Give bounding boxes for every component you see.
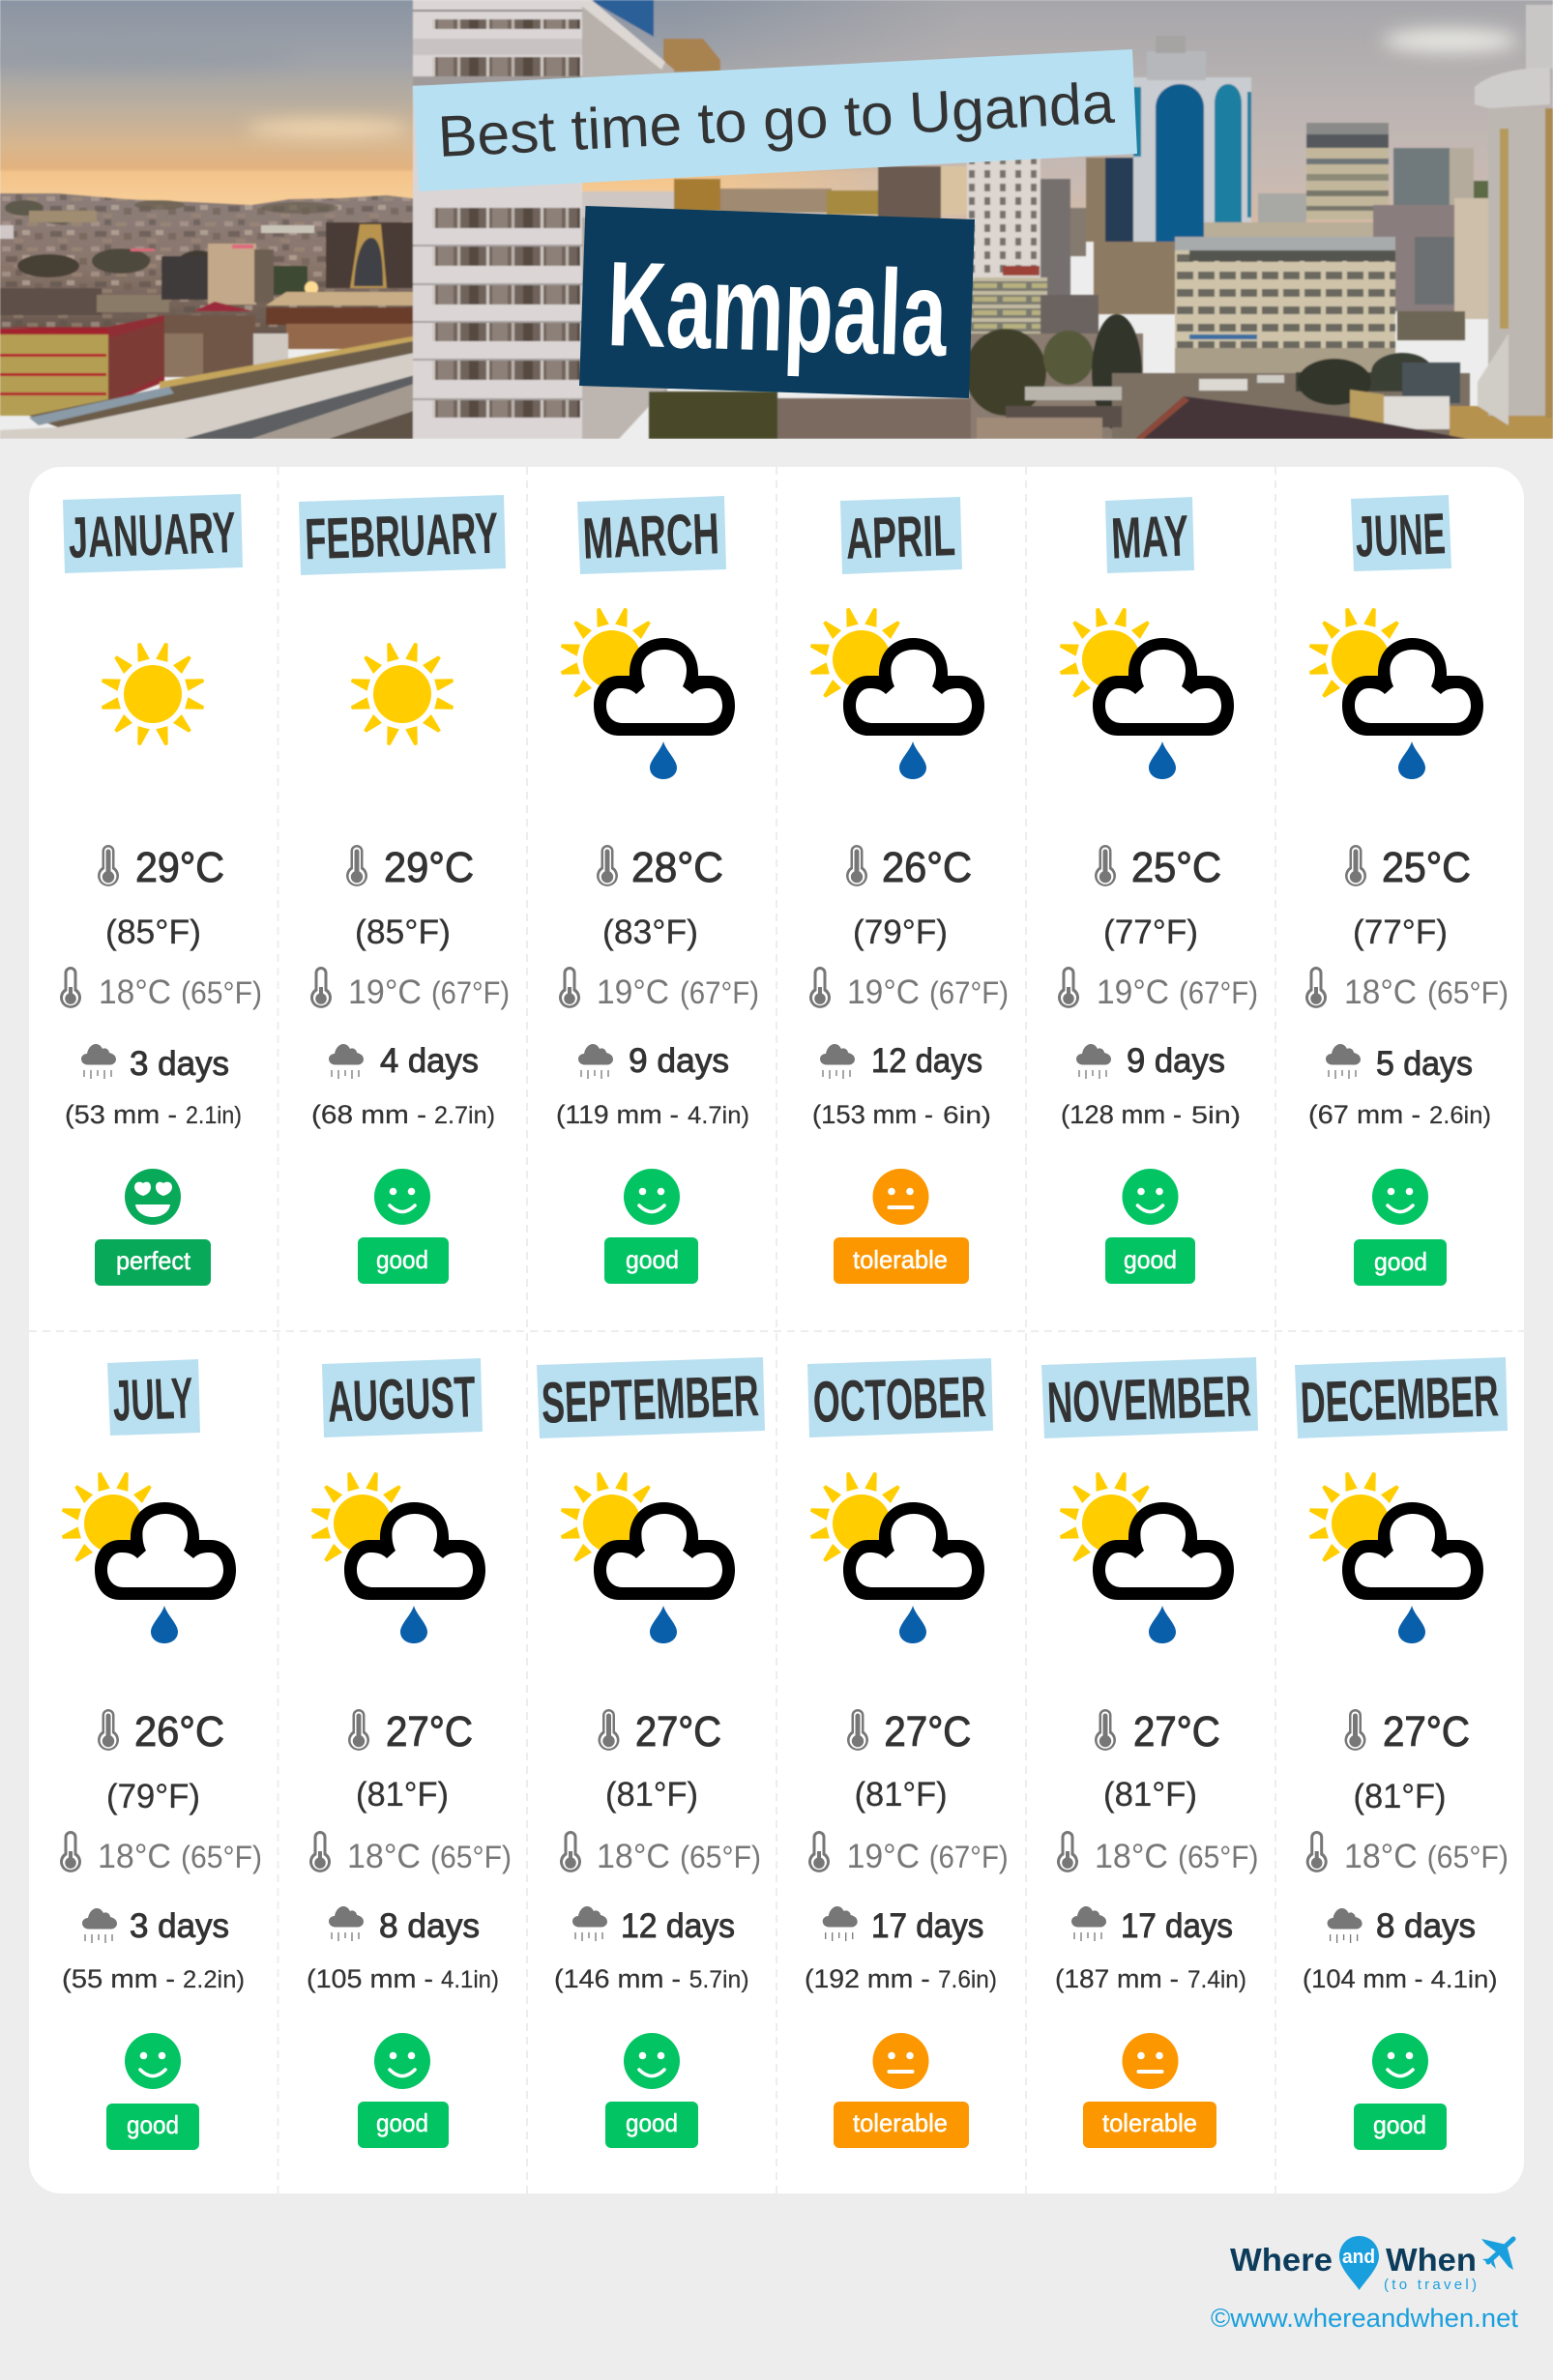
icon: sun, cloud and rain	[1308, 607, 1483, 779]
logo: Where and When (to travel): Where	[1230, 2242, 1333, 2278]
rainfall: (192 mm -	[805, 1964, 930, 1993]
rainy days	[329, 1042, 479, 1080]
icon: smiley	[1372, 2033, 1428, 2089]
high temperature: 29°C	[384, 844, 474, 891]
high temperature: 29°C	[135, 844, 224, 891]
icon: sun, cloud and rain	[310, 1471, 485, 1643]
low temperature	[1057, 1831, 1259, 1875]
rainy days	[572, 1906, 735, 1945]
high temperature	[846, 844, 972, 891]
rainy days	[329, 1906, 480, 1945]
panel: June	[1305, 495, 1509, 1286]
heading: June	[1351, 495, 1451, 571]
low temperature: 19°C	[348, 973, 422, 1011]
high temperature fahrenheit: (79°F)	[853, 914, 948, 951]
rainfall: 4.7in)	[688, 1102, 749, 1129]
heading: May: MAY	[1110, 503, 1189, 571]
icon: smiley	[374, 1169, 430, 1225]
low temperature	[60, 1831, 262, 1875]
heading: April	[840, 497, 962, 574]
high temperature	[98, 844, 224, 891]
rainy days	[1071, 1906, 1233, 1945]
icon: smiley	[624, 1169, 680, 1225]
rainfall	[1303, 1964, 1498, 1993]
rating: perfect: perfect	[116, 1246, 191, 1275]
logo: Where and When (to travel): (to travel)	[1384, 2277, 1477, 2293]
icon: map pin with and: and	[1342, 2247, 1375, 2268]
icon: airplane	[1481, 2239, 1513, 2270]
rainy days: 3 days	[130, 1045, 229, 1083]
low temperature: 18°C	[1344, 1838, 1418, 1875]
panel: July	[60, 1359, 262, 2150]
rainfall: 2.6in)	[1429, 1102, 1491, 1129]
low temperature: (67°F)	[431, 975, 510, 1010]
high temperature	[847, 1708, 971, 1756]
low temperature: (65°F)	[430, 1840, 512, 1874]
panel: January	[60, 494, 262, 1286]
high temperature	[598, 1708, 721, 1756]
rainfall	[1055, 1964, 1246, 1993]
high temperature fahrenheit: (81°F)	[356, 1776, 449, 1814]
rainy days	[820, 1042, 982, 1080]
high temperature	[1345, 844, 1471, 891]
rainy days	[1328, 1907, 1476, 1945]
icon: smiley	[624, 2033, 680, 2089]
heading: July: JULY	[111, 1365, 194, 1434]
icon: sun, cloud and rain	[1059, 607, 1234, 779]
logo: Where and When (to travel)	[1230, 2236, 1513, 2293]
high temperature fahrenheit: (81°F)	[1103, 1776, 1197, 1814]
low temperature	[1305, 967, 1509, 1011]
website credit: ©www.whereandwhen.net	[1211, 2304, 1518, 2333]
rainfall	[311, 1100, 495, 1129]
rainfall: (146 mm -	[554, 1964, 681, 1993]
low temperature: (65°F)	[1427, 975, 1509, 1010]
low temperature: 19°C	[847, 973, 920, 1011]
high temperature fahrenheit: (85°F)	[105, 914, 201, 951]
heading: November	[1041, 1357, 1258, 1438]
heading: November: NOVEMBER	[1046, 1363, 1252, 1436]
rainfall: 2.1in)	[186, 1102, 242, 1129]
rainy days: 8 days	[379, 1907, 480, 1945]
low temperature	[60, 967, 262, 1011]
high temperature fahrenheit: (79°F)	[106, 1778, 200, 1815]
rainfall: (128 mm -	[1061, 1100, 1182, 1129]
low temperature: 18°C	[1095, 1838, 1168, 1875]
rainfall	[62, 1964, 245, 1993]
low temperature	[808, 1831, 1009, 1875]
rating: good	[106, 2104, 199, 2150]
rainy days: 8 days	[1376, 1907, 1476, 1945]
low temperature: 18°C	[597, 1838, 670, 1875]
rainfall	[65, 1100, 242, 1129]
rating: good	[1354, 2104, 1447, 2150]
rainfall: 2.7in)	[434, 1102, 495, 1129]
rainfall: (53 mm -	[65, 1100, 177, 1129]
high temperature: 27°C	[635, 1708, 721, 1756]
rainfall: 4.1in)	[441, 1966, 499, 1993]
rainfall	[1308, 1100, 1491, 1129]
high temperature fahrenheit: (81°F)	[855, 1776, 948, 1814]
high temperature: 25°C	[1382, 844, 1471, 891]
rainy days: 17 days	[1121, 1907, 1233, 1945]
rating: good: good	[1124, 1245, 1177, 1274]
rainy days: 5 days	[1376, 1045, 1473, 1083]
low temperature	[309, 1831, 512, 1875]
high temperature: 27°C	[386, 1708, 473, 1756]
heading: February: FEBRUARY	[304, 501, 499, 571]
low temperature: (65°F)	[1178, 1840, 1259, 1874]
low temperature: (65°F)	[680, 1840, 761, 1874]
low temperature: 18°C	[347, 1838, 421, 1875]
rainfall: (55 mm -	[62, 1964, 175, 1993]
rainfall: 7.4in)	[1187, 1966, 1246, 1993]
low temperature	[1306, 1831, 1509, 1875]
rating: good: good	[127, 2110, 179, 2139]
panel: October	[805, 1358, 1009, 2148]
logo: Where and When (to travel): When	[1386, 2242, 1477, 2278]
panel: May	[1058, 497, 1258, 1284]
rainfall: (153 mm -	[812, 1100, 933, 1129]
low temperature: (65°F)	[181, 975, 262, 1010]
city banner: Kampala: Kampala	[605, 237, 950, 382]
high temperature fahrenheit: (85°F)	[355, 914, 451, 951]
icon: sun, cloud and rain	[809, 607, 984, 779]
icon: smiley	[125, 2033, 181, 2089]
rating: good	[1354, 1239, 1447, 1286]
low temperature	[310, 967, 510, 1011]
icon: sun	[101, 642, 205, 746]
rainfall: 7.6in)	[938, 1966, 997, 1993]
heading: August: AUGUST	[327, 1364, 477, 1435]
low temperature: 18°C	[99, 973, 171, 1011]
high temperature fahrenheit: (77°F)	[1103, 914, 1198, 951]
rainy days: 9 days	[1127, 1042, 1225, 1080]
heading: July	[107, 1359, 200, 1436]
rainy days	[82, 1907, 229, 1945]
low temperature: (67°F)	[929, 1840, 1009, 1874]
rainy days: 4 days	[380, 1042, 479, 1080]
rating: tolerable: tolerable	[853, 2108, 948, 2137]
icon: smiley	[1372, 1169, 1428, 1225]
panel: August	[307, 1358, 512, 2148]
high temperature: 27°C	[1383, 1708, 1470, 1756]
rainfall	[812, 1100, 991, 1129]
heading: October	[807, 1358, 993, 1437]
low temperature	[1058, 967, 1258, 1011]
city banner: Kampala	[579, 206, 975, 398]
rainy days	[81, 1044, 229, 1083]
high temperature: 25°C	[1131, 844, 1221, 891]
low temperature	[809, 967, 1009, 1011]
rainfall: (119 mm -	[556, 1100, 679, 1129]
high temperature	[98, 1708, 224, 1756]
panel: February	[299, 495, 510, 1284]
rainfall	[556, 1100, 749, 1129]
icon: smiley	[1122, 1169, 1178, 1225]
rainfall: 5.7in)	[689, 1966, 749, 1993]
rating: tolerable	[834, 1237, 969, 1284]
icon: smiley	[374, 2033, 430, 2089]
rainfall: 5in)	[1191, 1102, 1241, 1129]
heading: June: JUNE	[1354, 501, 1447, 569]
low temperature: (65°F)	[1427, 1840, 1509, 1874]
rainfall: 6in)	[943, 1102, 991, 1129]
icon: sun	[350, 642, 454, 746]
heading: May	[1105, 497, 1194, 573]
panel: white months card	[29, 467, 1524, 2193]
high temperature: 27°C	[884, 1708, 971, 1756]
icon: sun, cloud and rain	[61, 1471, 236, 1643]
rating: good: good	[376, 2108, 428, 2137]
icon: sun, cloud and rain	[1059, 1471, 1234, 1643]
rainy days: 12 days	[871, 1042, 982, 1080]
heading: March: MARCH	[581, 501, 720, 571]
rainy days: 3 days	[130, 1907, 229, 1945]
rainy days	[1326, 1044, 1473, 1083]
icon: neutral face	[872, 2033, 928, 2089]
high temperature: 27°C	[1133, 1708, 1220, 1756]
panel: March	[556, 496, 759, 1284]
rainfall: (187 mm -	[1055, 1964, 1179, 1993]
low temperature: (67°F)	[680, 975, 759, 1010]
low temperature: 18°C	[1344, 973, 1417, 1011]
rainy days	[1076, 1042, 1225, 1080]
rating: good	[1105, 1237, 1195, 1284]
icon: neutral face	[872, 1169, 928, 1225]
low temperature: 19°C	[1097, 973, 1169, 1011]
low temperature	[560, 1831, 761, 1875]
rating: good	[358, 2102, 449, 2148]
high temperature fahrenheit: (83°F)	[602, 914, 698, 951]
high temperature fahrenheit: (81°F)	[1354, 1778, 1447, 1815]
high temperature: 26°C	[134, 1708, 224, 1756]
icon: map pin with and	[1339, 2236, 1379, 2290]
rainy days	[823, 1906, 983, 1945]
title banner: Best time to go to Uganda	[413, 49, 1137, 191]
title banner: Best time to go to Uganda: Best time to go to Uganda	[436, 71, 1116, 169]
rating: tolerable	[1083, 2102, 1216, 2148]
heading: August	[322, 1358, 483, 1437]
rainfall: (104 mm -	[1303, 1964, 1423, 1993]
rainy days: 9 days	[629, 1042, 729, 1080]
heading: September	[537, 1357, 765, 1438]
low temperature: 19°C	[597, 973, 669, 1011]
heading: February	[299, 495, 506, 575]
icon: sun, cloud and rain	[560, 1471, 735, 1643]
rating: tolerable	[834, 2102, 969, 2148]
rating: good	[604, 1237, 698, 1284]
rating: tolerable: tolerable	[853, 1245, 948, 1274]
rainfall	[805, 1964, 997, 1993]
heading: September: SEPTEMBER	[541, 1363, 760, 1436]
panel: April	[809, 497, 1009, 1284]
header photo: Kampala skyline	[0, 0, 1553, 439]
high temperature	[1344, 1708, 1470, 1756]
panel: December	[1295, 1357, 1509, 2150]
rating: good: good	[626, 1245, 679, 1274]
rating: good: good	[376, 1245, 428, 1274]
rating: good: good	[1373, 2110, 1426, 2139]
rating: perfect	[95, 1239, 211, 1286]
rating: good: good	[1374, 1247, 1427, 1276]
low temperature: (67°F)	[929, 975, 1009, 1010]
heading: March	[577, 496, 726, 574]
low temperature	[559, 967, 759, 1011]
high temperature: 26°C	[882, 844, 972, 891]
high temperature	[1095, 844, 1221, 891]
icon: love-eyes smiley	[125, 1169, 181, 1225]
panel: November	[1041, 1357, 1259, 2148]
rainy days: 12 days	[621, 1907, 735, 1945]
heading: January	[63, 494, 243, 573]
heading: January: JANUARY	[68, 500, 237, 570]
rainy days	[578, 1042, 729, 1080]
high temperature	[1095, 1708, 1220, 1756]
high temperature	[346, 844, 474, 891]
rainfall: 2.2in)	[183, 1966, 245, 1993]
high temperature fahrenheit: (77°F)	[1353, 914, 1448, 951]
icon: sun, cloud and rain	[809, 1471, 984, 1643]
high temperature fahrenheit: (81°F)	[605, 1776, 698, 1814]
rainfall	[1061, 1100, 1241, 1129]
panel: September	[537, 1357, 765, 2148]
low temperature: 19°C	[847, 1838, 920, 1875]
rainfall: (67 mm -	[1308, 1100, 1421, 1129]
rainfall: (105 mm -	[307, 1964, 433, 1993]
low temperature: (65°F)	[181, 1840, 262, 1874]
rating: good	[358, 1237, 449, 1284]
icon: neutral face	[1122, 2033, 1178, 2089]
low temperature: (67°F)	[1179, 975, 1258, 1010]
rating: tolerable: tolerable	[1102, 2108, 1197, 2137]
high temperature	[348, 1708, 473, 1756]
low temperature: 18°C	[98, 1838, 171, 1875]
rainfall	[554, 1964, 749, 1993]
rating: good: good	[626, 2108, 678, 2137]
rainy days: 17 days	[871, 1907, 983, 1945]
rainfall: (68 mm -	[311, 1100, 426, 1129]
heading: April: APRIL	[845, 503, 956, 571]
rainfall: 4.1in)	[1431, 1966, 1498, 1993]
heading: October: OCTOBER	[812, 1364, 987, 1435]
rating: good	[605, 2102, 698, 2148]
icon: sun, cloud and rain	[560, 607, 735, 779]
icon: sun, cloud and rain	[1308, 1471, 1483, 1643]
high temperature: 28°C	[631, 844, 723, 891]
rainfall	[307, 1964, 499, 1993]
